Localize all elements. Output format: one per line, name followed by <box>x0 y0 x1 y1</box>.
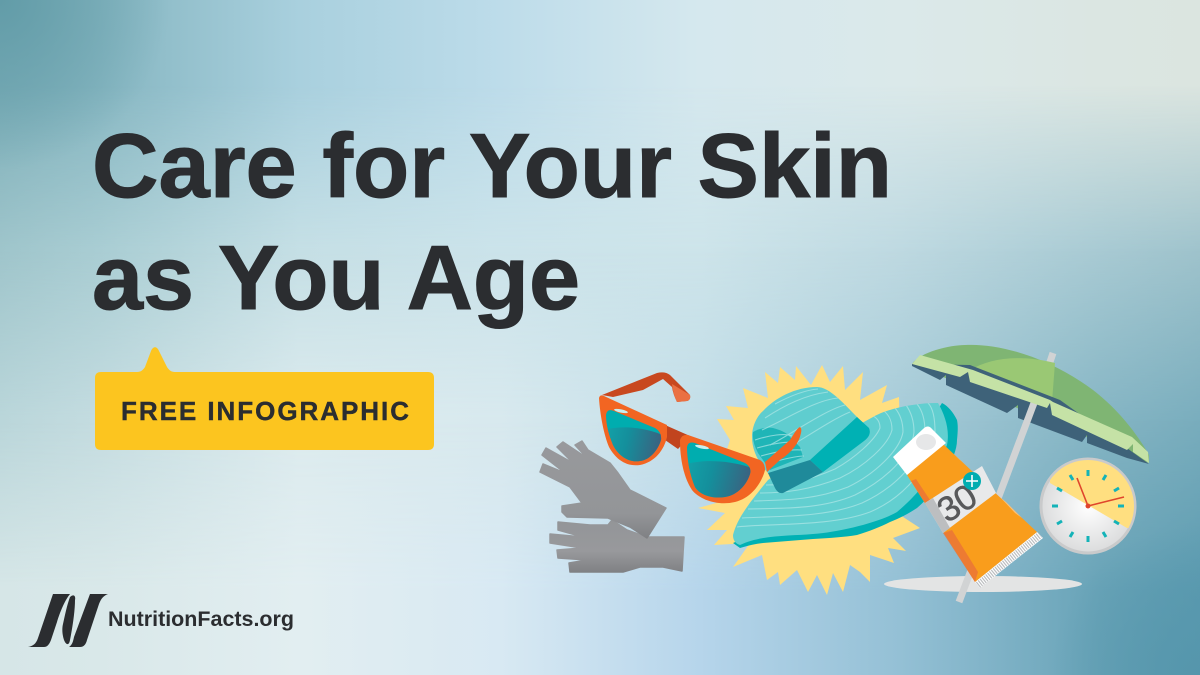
right frame <box>680 435 765 503</box>
tube crimp <box>975 532 1043 588</box>
logo: NutritionFacts.org: NutritionFacts.org <box>108 607 294 631</box>
hat crown stripes <box>755 389 850 464</box>
callout: free infographic: FREE INFOGRAPHIC <box>121 396 409 426</box>
callout: free infographic <box>95 347 434 450</box>
hat brim edge <box>733 403 958 548</box>
canopy rim band <box>912 355 1149 463</box>
far temple arm <box>602 372 690 402</box>
hat brim stripes <box>737 403 935 527</box>
hat crown inner patch <box>753 428 803 470</box>
bottom glove <box>550 520 684 572</box>
title <box>92 116 892 329</box>
pole <box>959 403 1034 602</box>
icon: sunglasses <box>599 372 801 505</box>
canopy <box>912 345 1149 463</box>
clock ticks <box>1052 470 1124 542</box>
icon: gloves <box>540 441 684 572</box>
left frame <box>599 395 667 465</box>
near temple arm <box>765 427 801 472</box>
right lens <box>687 442 750 498</box>
clock hands <box>1077 478 1124 506</box>
hat crown <box>752 387 870 493</box>
hat brim <box>733 403 948 545</box>
left lens <box>606 410 662 462</box>
icon: beach umbrella <box>912 345 1149 602</box>
tube body <box>907 443 1037 582</box>
canopy underside <box>912 364 1149 464</box>
canopy highlight panel <box>970 358 1055 402</box>
tube label <box>925 466 996 533</box>
bridge <box>665 425 690 449</box>
SPF number: 30 <box>930 476 984 530</box>
icon: sun <box>698 365 920 595</box>
plus badge <box>963 472 981 490</box>
title: Care for Your Skin <box>92 116 892 217</box>
icon: clock <box>1041 455 1140 553</box>
hat band shaded <box>768 460 823 493</box>
title: as You Age <box>92 228 580 329</box>
icon: sunscreen tube <box>893 426 1043 588</box>
clock yellow wedge <box>1050 460 1134 528</box>
top glove <box>540 441 666 538</box>
tube cap <box>893 426 946 475</box>
pole tip <box>1048 353 1053 368</box>
logo: NutritionFacts.org <box>28 594 294 647</box>
shadow on sand <box>884 576 1082 592</box>
hat band <box>810 417 870 472</box>
icon: sun hat <box>733 387 958 548</box>
logo mark <box>28 594 108 647</box>
